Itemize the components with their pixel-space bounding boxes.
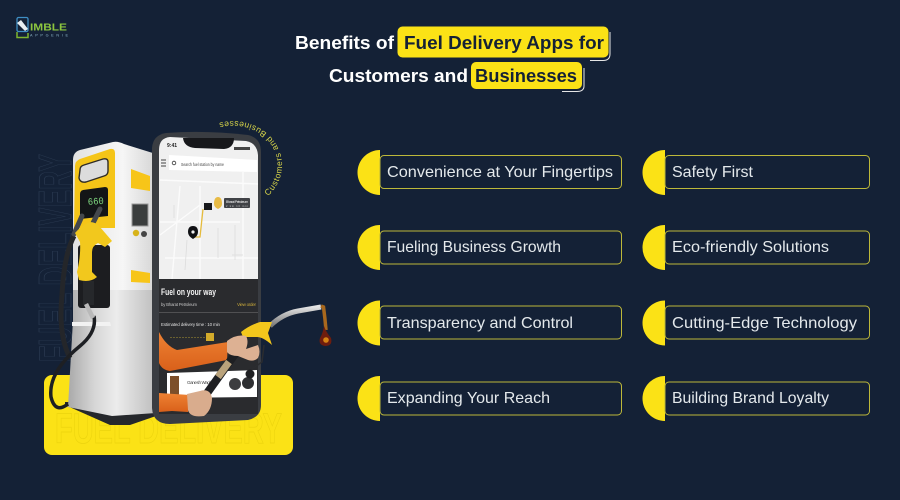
logo: Nimble Appgenie: [17, 18, 68, 38]
title line 1: Benefits of: [295, 33, 395, 53]
fuel drop: [320, 326, 331, 346]
benefit: Cutting-Edge Technology: [642, 300, 870, 346]
driver card: [167, 370, 257, 398]
nozzle holder: [78, 245, 110, 308]
curved phrase: Customers and Businesses: Customers and Businesses: [220, 121, 282, 195]
yellow nozzle: [75, 222, 112, 281]
fuel pump illustration: [51, 142, 156, 425]
map marker: station: [214, 197, 222, 209]
benefit: Safety First: [642, 150, 870, 195]
status time: 9:41: [167, 143, 177, 149]
route: [193, 209, 203, 237]
map callout: 2 km 10 min: [226, 205, 249, 208]
yellow front plate: [74, 149, 115, 228]
pump body: [68, 280, 156, 416]
pump base: [65, 402, 156, 425]
benefit: Transparency and Control: Transparency and Control: [387, 315, 573, 332]
benefit: Transparency and Control: [358, 300, 622, 346]
map callout: [224, 198, 250, 208]
order panel: View order: [237, 302, 256, 307]
benefit: Expanding Your Reach: Expanding Your Reach: [387, 390, 550, 407]
map marker: truck: [204, 203, 212, 210]
order panel: [159, 279, 258, 414]
order panel: Fuel on your way: [161, 287, 216, 297]
logo: Nimble Appgenie: APPGENIE: [30, 34, 68, 38]
lower arm: [159, 393, 190, 412]
pump window: [79, 159, 108, 182]
phone frame: [152, 132, 261, 424]
phone notch: [183, 138, 234, 149]
benefit: Building Brand Loyalty: Building Brand Loyalty: [672, 390, 829, 407]
side labels: [131, 169, 150, 191]
hoses: [61, 236, 74, 358]
side controls: [132, 204, 148, 226]
upper arm: [159, 332, 228, 371]
nozzle handle: [205, 343, 243, 396]
benefit list: [358, 150, 870, 421]
pump display: [80, 187, 108, 219]
yellow base panel: [44, 375, 293, 455]
map screen: [159, 137, 258, 279]
search bar: [161, 155, 257, 172]
benefit: Safety First: Safety First: [672, 164, 754, 181]
benefit: Expanding Your Reach: [358, 376, 622, 421]
logo: Nimble Appgenie: IMBLE: [30, 22, 67, 34]
benefit: Fueling Business Growth: [358, 225, 622, 270]
lower hand: [187, 390, 212, 416]
pump display: 660: [88, 197, 104, 209]
map marker: destination: [188, 226, 198, 239]
benefit: Fueling Business Growth: Fueling Business Growth: [387, 239, 561, 256]
hand holding fuel nozzle: [159, 306, 331, 416]
title line 2: Customers and: [329, 66, 468, 86]
title: [295, 26, 610, 92]
title line 1: Fuel Delivery Apps for: [404, 33, 604, 53]
benefit: Building Brand Loyalty: [642, 376, 870, 421]
search bar: Search fuel station by name: [181, 162, 224, 167]
watermark on panel: FUEL DELIVERY: [55, 405, 282, 453]
nozzle yellow cap: [241, 322, 272, 345]
map callout: Bharat Petroleum: [226, 200, 248, 204]
title line 2: [329, 62, 584, 92]
order panel: Estimated delivery time : 10 min: [161, 322, 220, 327]
title line 1: [295, 26, 610, 60]
phone: [152, 132, 261, 424]
benefit: Convenience at Your Fingertips: Convenience at Your Fingertips: [387, 164, 613, 181]
vertical watermark: Fuel Delivery: FUEL DELIVERY: [29, 154, 81, 362]
benefit: Convenience at Your Fingertips: [358, 150, 622, 195]
order panel: by Bharat Petroleum: [161, 302, 198, 307]
benefit: Eco-friendly Solutions: Eco-friendly Solutions: [672, 239, 829, 256]
fuel spout: [270, 307, 321, 326]
driver card: Ganesh Wagh: [187, 380, 212, 385]
benefit: Cutting-Edge Technology: Cutting-Edge Technology: [672, 315, 857, 332]
title line 2: Businesses: [475, 66, 577, 86]
status icons: [234, 147, 250, 150]
benefit: Eco-friendly Solutions: [642, 225, 870, 270]
upper hand: [227, 336, 260, 361]
map streets: [160, 172, 258, 279]
